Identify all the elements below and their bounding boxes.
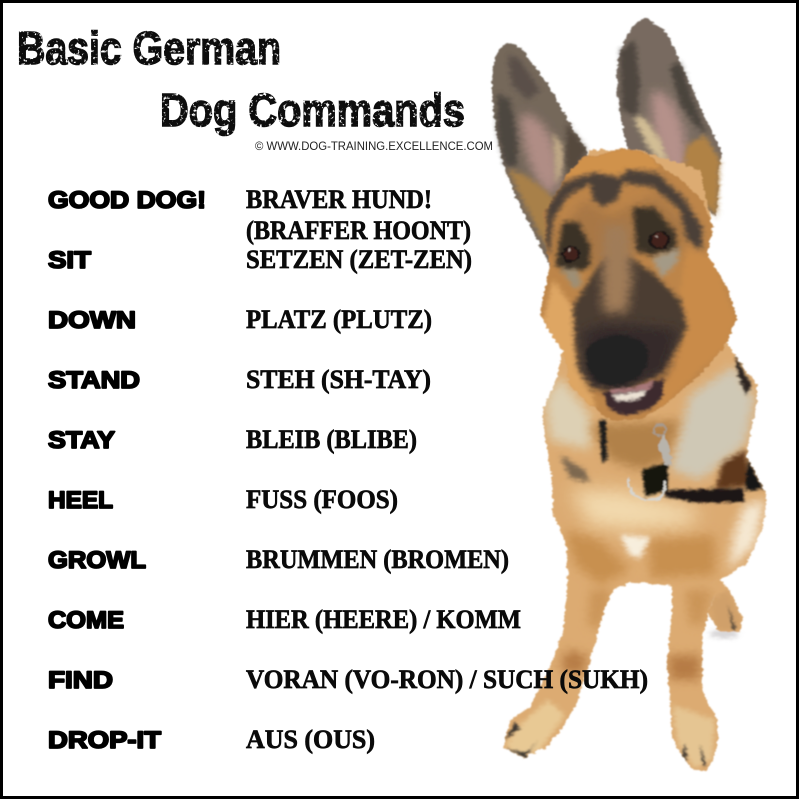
row: growl: GROWL bbox=[48, 547, 146, 574]
left grey under eye bbox=[560, 268, 582, 288]
collar rings and tag bbox=[628, 424, 672, 500]
dark ruff marks bbox=[735, 355, 752, 395]
row: good dog: GOOD DOG! bbox=[48, 187, 206, 214]
row: heel: FUSS (FOOS) bbox=[246, 485, 398, 514]
neck brown shading bbox=[590, 420, 680, 470]
left eye patch bbox=[555, 222, 590, 272]
left paw bbox=[505, 700, 565, 758]
chest side shading bbox=[560, 455, 590, 482]
row: stand: STAND bbox=[48, 367, 140, 394]
row: stay bbox=[48, 425, 417, 454]
muzzle dark bbox=[573, 257, 687, 392]
claws and toe gaps bbox=[505, 605, 736, 768]
knee shading bbox=[560, 650, 700, 680]
dog illustration: German Shepherd bbox=[492, 18, 767, 770]
upper face brown bbox=[555, 195, 690, 270]
rear haunch light bbox=[728, 500, 765, 570]
title bbox=[17, 22, 465, 136]
row: drop-it: DROP-IT bbox=[48, 727, 161, 754]
row: growl: BRUMMEN (BROMEN) bbox=[246, 545, 509, 574]
row: down bbox=[48, 305, 432, 334]
lower snout shade bbox=[582, 325, 678, 390]
right paw bbox=[672, 705, 715, 768]
row: find: FIND bbox=[48, 667, 113, 694]
left light ruff bbox=[545, 377, 590, 450]
row: stand bbox=[48, 365, 431, 394]
white chest tuft bbox=[620, 535, 650, 558]
soft rear paw shadow bbox=[709, 630, 739, 638]
row: good dog: BRAVER HUND! bbox=[246, 185, 432, 214]
row: find bbox=[48, 665, 648, 694]
right ear bbox=[617, 18, 722, 217]
belly shading bbox=[565, 530, 715, 585]
row: drop-it: AUS (OUS) bbox=[246, 725, 375, 754]
rear paw bbox=[712, 594, 740, 629]
mouth bbox=[603, 378, 664, 416]
row: good dog bbox=[48, 185, 471, 245]
row: heel: HEEL bbox=[48, 487, 113, 514]
snout bridge bbox=[602, 225, 632, 312]
title line 2: Dog Commands bbox=[160, 84, 465, 136]
command table bbox=[48, 185, 648, 754]
head top tufts bbox=[565, 148, 660, 178]
upper leg shading bbox=[588, 590, 712, 630]
right cheek bbox=[657, 250, 735, 407]
eyes bbox=[562, 231, 670, 262]
right light ruff bbox=[670, 365, 755, 480]
chest cream fur bbox=[570, 490, 700, 530]
left ear bbox=[492, 43, 590, 267]
website credit: © WWW.DOG-TRAINING.EXCELLENCE.COM bbox=[255, 141, 493, 153]
row: sit: SIT bbox=[48, 247, 91, 274]
row: stay: STAY bbox=[48, 427, 115, 454]
dog head bbox=[540, 148, 737, 420]
row: find: VORAN (VO-RON) / SUCH (SUKH) bbox=[246, 665, 648, 694]
row: stay: BLEIB (BLIBE) bbox=[246, 425, 417, 454]
row: come: COME bbox=[48, 607, 124, 634]
row: sit bbox=[48, 245, 472, 274]
row: come bbox=[48, 605, 521, 634]
row: heel bbox=[48, 485, 398, 514]
row: down: DOWN bbox=[48, 307, 136, 334]
leash strap bbox=[599, 420, 607, 463]
torso and legs bbox=[503, 150, 767, 770]
right grey under eye bbox=[652, 248, 680, 278]
row: come: HIER (HEERE) / KOMM bbox=[246, 605, 521, 634]
row: sit: SETZEN (ZET-ZEN) bbox=[246, 245, 472, 274]
title line 1: Basic German bbox=[17, 22, 281, 74]
forehead dark band bbox=[545, 170, 702, 257]
nose bbox=[586, 335, 648, 386]
right eye patch bbox=[633, 207, 677, 256]
row: drop-it bbox=[48, 725, 375, 754]
row: stand: STEH (SH-TAY) bbox=[246, 365, 431, 394]
harness strap bbox=[665, 488, 745, 503]
row: growl bbox=[48, 545, 509, 574]
row: down: PLATZ (PLUTZ) bbox=[246, 305, 432, 334]
left cheek bbox=[543, 280, 597, 407]
row: good dog: (BRAFFER HOONT) bbox=[246, 216, 471, 245]
